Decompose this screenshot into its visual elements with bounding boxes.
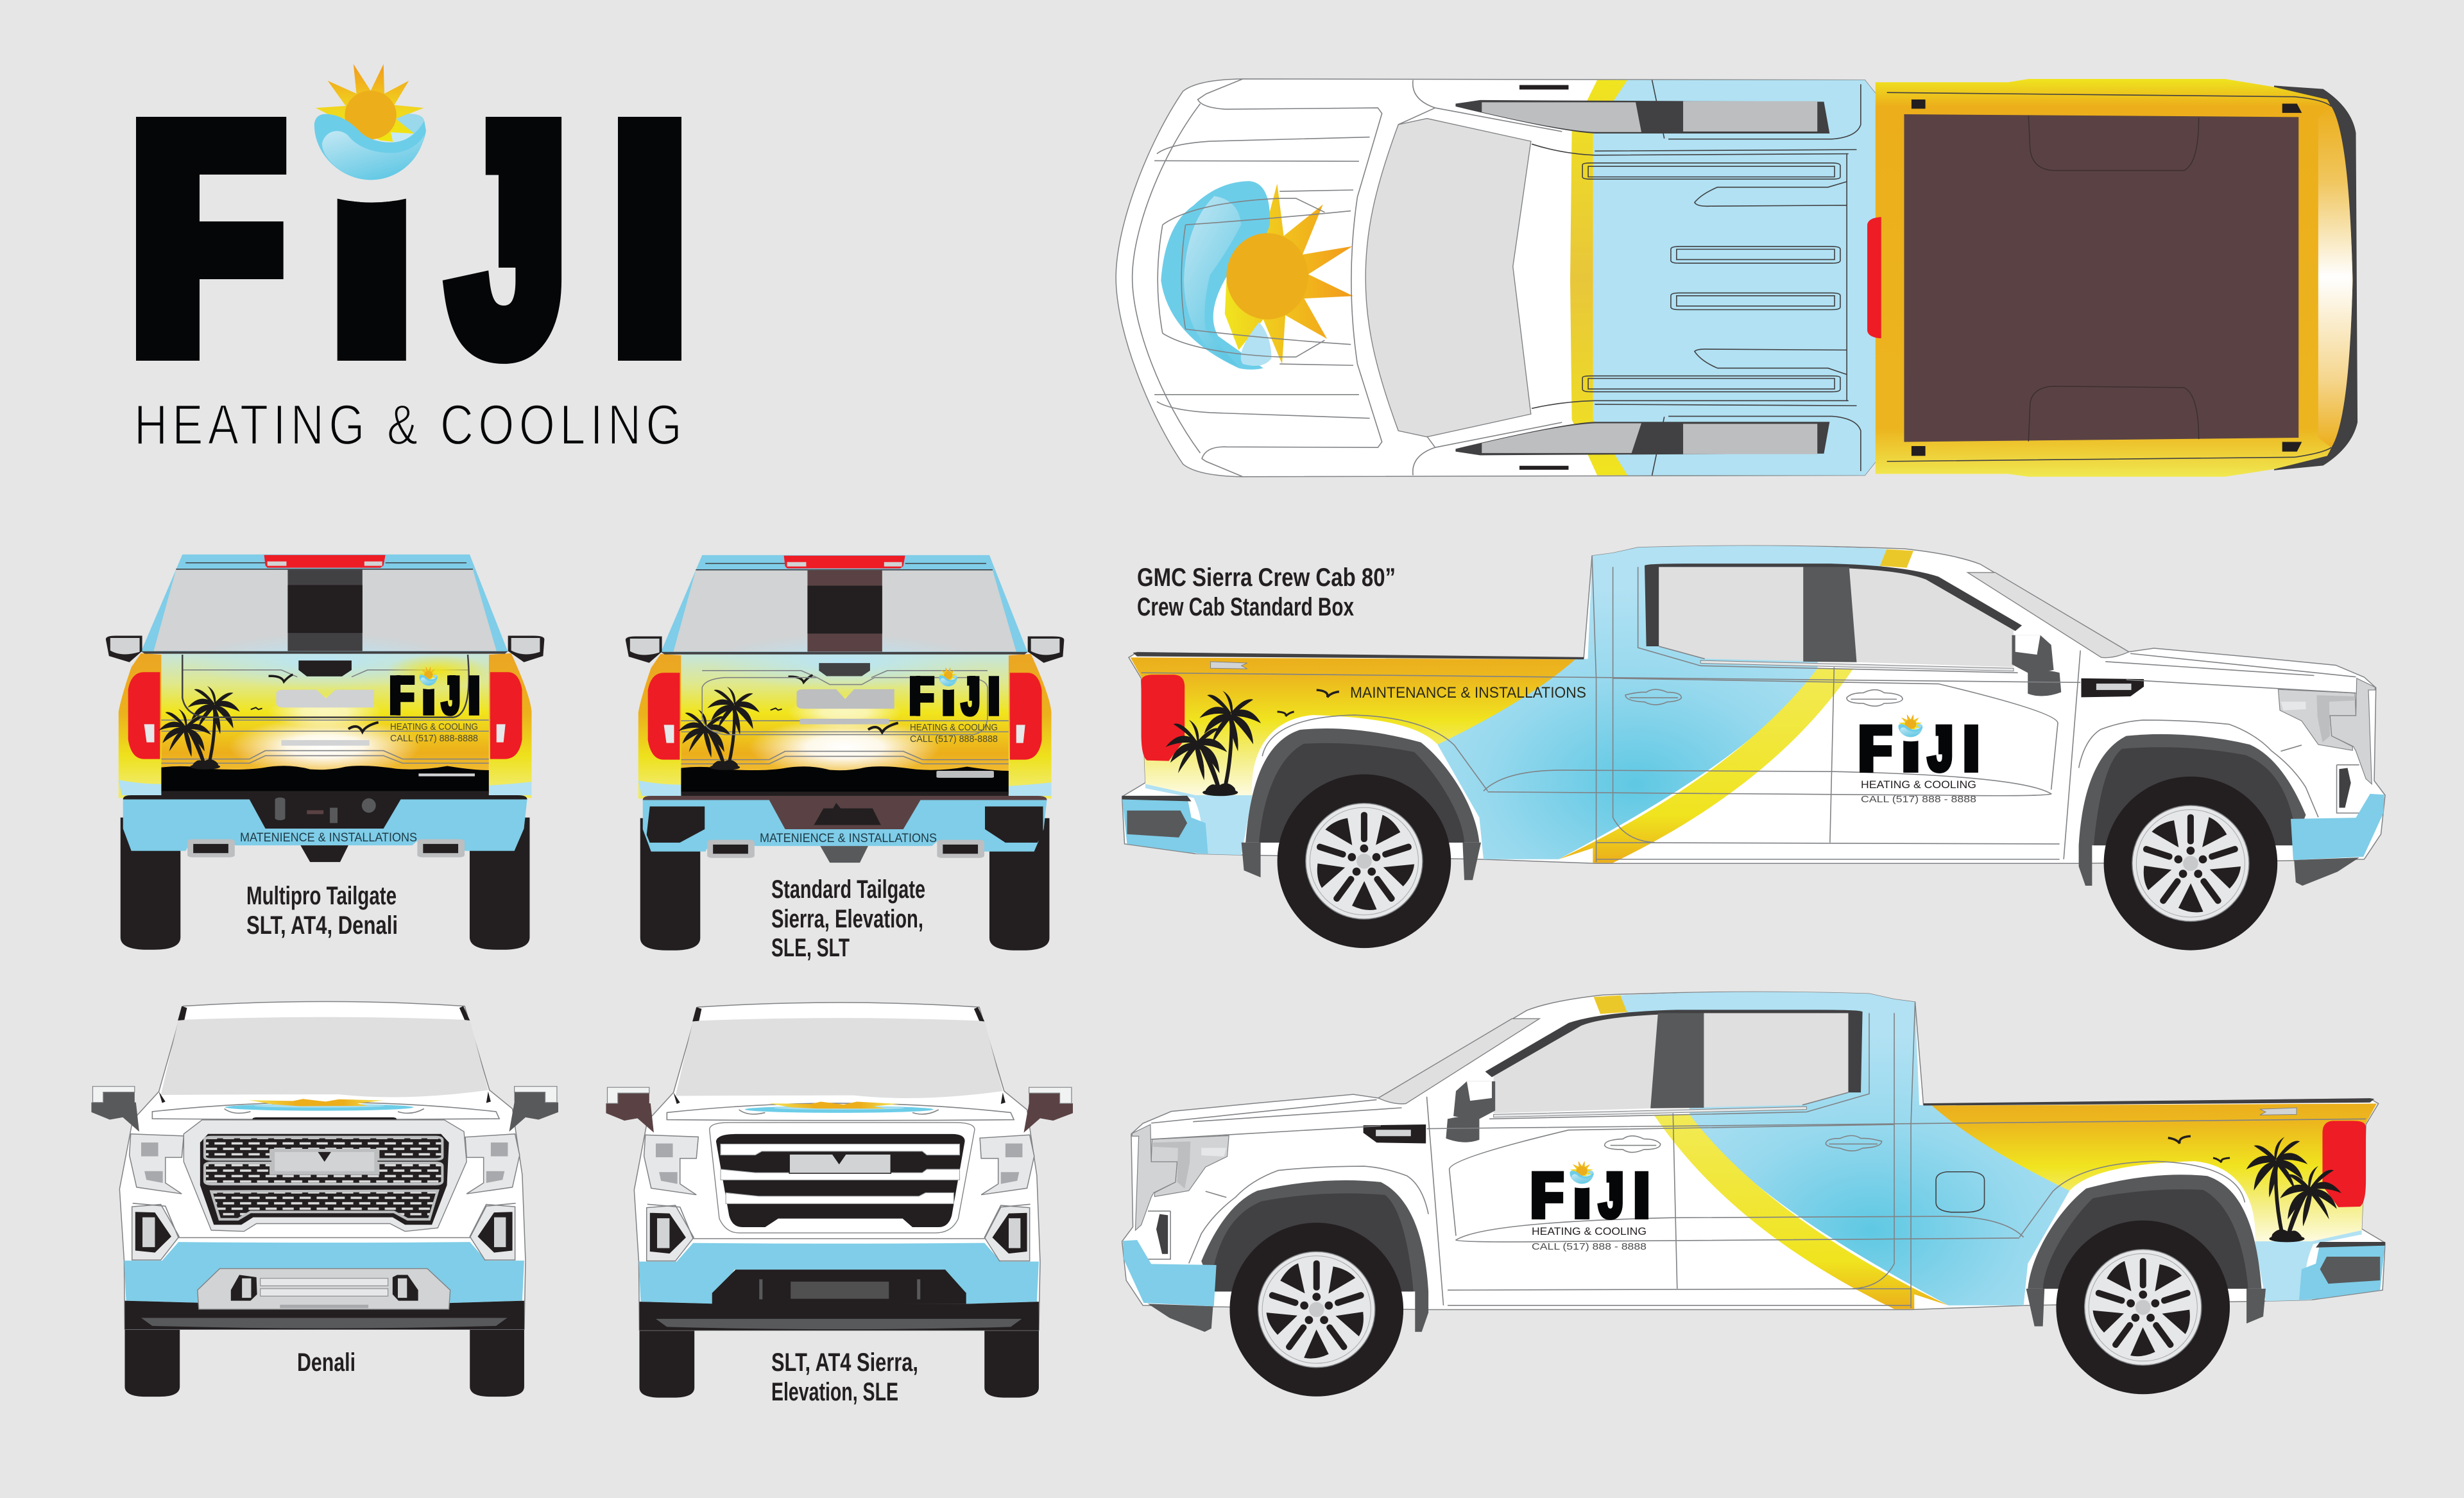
side contact text passenger: HEATING & COOLING	[1861, 779, 1976, 791]
multipro tailgate handle	[298, 660, 352, 676]
caption: Multipro Tailgate	[246, 882, 398, 940]
Denali lower chrome grille	[198, 1269, 450, 1309]
caption: Denali: Denali	[297, 1348, 355, 1377]
caption: Standard Tailgate: SLE, SLT	[771, 934, 850, 962]
side logo driver: i	[1572, 1160, 1592, 1231]
bed cover	[1904, 114, 2298, 442]
tailgate logo right: F	[909, 666, 934, 726]
truck rear view: Multipro tailgate	[106, 555, 544, 950]
standard tailgate handle	[819, 663, 870, 676]
hood sun logo flat	[225, 1099, 413, 1111]
side logo passenger	[1858, 712, 1980, 784]
side mirrors	[91, 1087, 558, 1132]
tailgate logo left: J	[441, 666, 461, 725]
side logo driver: I	[1632, 1160, 1650, 1231]
truck bed	[1876, 79, 2352, 477]
rear window centre band	[807, 571, 882, 651]
caption: SLT AT4 Sierra: Elevation, SLE	[771, 1378, 898, 1406]
side contact text passenger	[1861, 779, 1976, 805]
tailgate highlight	[2318, 107, 2352, 447]
side window bottom	[1455, 422, 1829, 455]
side contact text driver: HEATING & COOLING	[1532, 1225, 1647, 1237]
truck side view: driver side	[1122, 992, 2385, 1397]
blue roof wrap	[1593, 80, 1887, 476]
tailgate contact text right: HEATING & COOLING	[910, 722, 998, 733]
tailgate contact text right: CALL (517) 888-8888	[910, 734, 998, 745]
side logo passenger: J	[1928, 713, 1954, 784]
side logo driver: F	[1530, 1160, 1564, 1231]
yellow stripe	[1570, 80, 1627, 476]
truck rear view: standard tailgate	[626, 555, 1064, 951]
caption: Standard Tailgate	[771, 875, 925, 962]
side logo driver	[1530, 1160, 1650, 1231]
side contact text passenger: CALL (517) 888 - 8888	[1861, 794, 1976, 805]
side mirrors brown	[606, 1087, 1073, 1133]
bumper step plate	[643, 791, 1047, 863]
rear brake light	[1867, 217, 1881, 338]
cab and hood body	[1116, 79, 1887, 477]
logo wordmark	[136, 64, 681, 364]
tailgate logo right	[909, 666, 1001, 726]
caption: GMC Sierra Crew Cab: Crew Cab Standard Box	[1137, 593, 1354, 621]
tailgate logo right: i	[941, 666, 956, 726]
tailgate contact text left: CALL (517) 888-8888	[390, 733, 478, 744]
multipro tailgate yellow corner	[387, 654, 489, 689]
logo wordmark: J	[448, 58, 569, 418]
tailgate logo left: i	[421, 666, 436, 725]
truck top view	[1116, 79, 2357, 477]
truck front view: Denali	[91, 1002, 558, 1397]
bumper step plate	[123, 791, 527, 862]
mirror marks	[1519, 85, 1568, 470]
caption: GMC Sierra Crew Cab	[1137, 564, 1396, 621]
logo wordmark: I	[608, 57, 691, 418]
bumper text right: MATENIENCE & INSTALLATIONS	[760, 832, 937, 845]
tailgate logo left: F	[389, 666, 415, 725]
truck front view: SLT AT4 Sierra	[606, 1003, 1073, 1398]
side window top	[1455, 100, 1829, 133]
rear window centre band	[287, 570, 363, 651]
logo: FIJI Heating & Cooling	[127, 57, 691, 457]
tailgate contact text left: HEATING & COOLING	[390, 721, 478, 732]
tailgate logo left	[389, 666, 481, 725]
windshield	[1365, 119, 1531, 437]
tailgate shadow edge	[2274, 85, 2357, 470]
side logo passenger: F	[1858, 713, 1892, 784]
side logo passenger: i	[1901, 712, 1921, 784]
hood vent	[252, 1117, 397, 1124]
caption: SLT AT4 Sierra: SLT, AT4 Sierra,	[771, 1348, 918, 1377]
caption: GMC Sierra Crew Cab: GMC Sierra Crew Cab 80”	[1137, 564, 1396, 592]
side logo passenger: I	[1962, 714, 1980, 784]
caption: Multipro Tailgate: Multipro Tailgate	[246, 882, 397, 910]
logo tagline: HEATING & COOLING	[134, 393, 682, 457]
caption: Multipro Tailgate: SLT, AT4, Denali	[246, 911, 398, 940]
caption: SLT AT4 Sierra	[771, 1348, 918, 1406]
Denali grille	[184, 1120, 466, 1232]
truck side view: passenger side	[1122, 546, 2385, 951]
caption: Standard Tailgate: Standard Tailgate	[771, 875, 925, 904]
logo wordmark: F	[127, 58, 287, 418]
caption: Standard Tailgate: Sierra, Elevation,	[771, 905, 923, 933]
hood sun logo	[1161, 181, 1353, 370]
tailgate logo left: I	[467, 666, 481, 725]
standard tailgate lines	[702, 678, 988, 735]
tailgate contact text right	[910, 722, 998, 745]
bumper text left: MATENIENCE & INSTALLATIONS	[240, 831, 417, 845]
side logo driver: J	[1598, 1160, 1624, 1231]
fuel door	[1936, 1172, 1985, 1212]
side contact text driver: CALL (517) 888 - 8888	[1532, 1241, 1647, 1252]
bed text: MAINTENANCE & INSTALLATIONS	[1350, 684, 1586, 702]
bed tie-downs	[1912, 99, 2302, 456]
tailgate logo right: J	[961, 666, 980, 726]
SLT grille	[710, 1123, 975, 1233]
tailgate logo right: I	[987, 666, 1001, 726]
SLT lower intake	[712, 1270, 966, 1304]
side contact text driver	[1532, 1225, 1647, 1252]
hood sun logo flat	[745, 1101, 934, 1113]
logo wordmark: i	[325, 57, 418, 418]
tailgate badge	[277, 690, 475, 777]
tailgate badge	[797, 689, 994, 778]
tailgate contact text left	[390, 721, 478, 744]
multipro tailgate lines	[182, 655, 469, 718]
